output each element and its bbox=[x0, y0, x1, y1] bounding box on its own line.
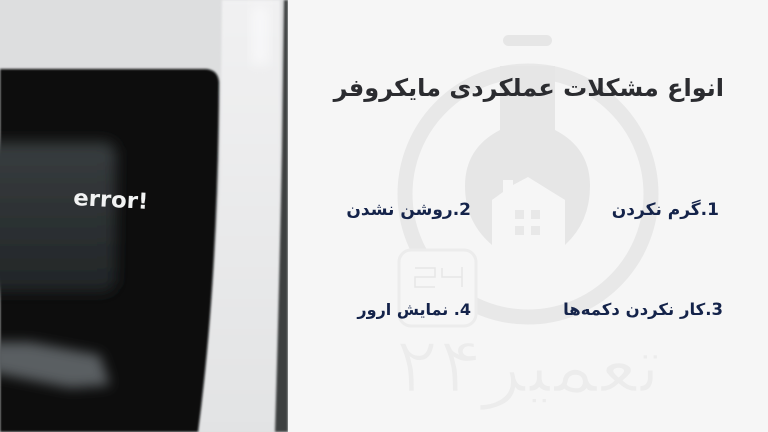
list item 4: 4. نمایش ارور bbox=[357, 300, 471, 319]
error text on display: error! bbox=[73, 186, 149, 215]
list item 2: 2.روشن نشدن bbox=[346, 200, 471, 220]
watermark: 24 badge bbox=[399, 250, 476, 326]
title: انواع مشکلات عملکردی مایکروفر bbox=[334, 74, 724, 102]
watermark: brand name: تعمیر۲۴ bbox=[395, 321, 661, 412]
list item 3: 3.کار نکردن دکمه‌ها bbox=[563, 300, 723, 319]
list item 1: 1.گرم نکردن bbox=[612, 200, 719, 220]
photo: microwave display showing error bbox=[0, 0, 288, 432]
